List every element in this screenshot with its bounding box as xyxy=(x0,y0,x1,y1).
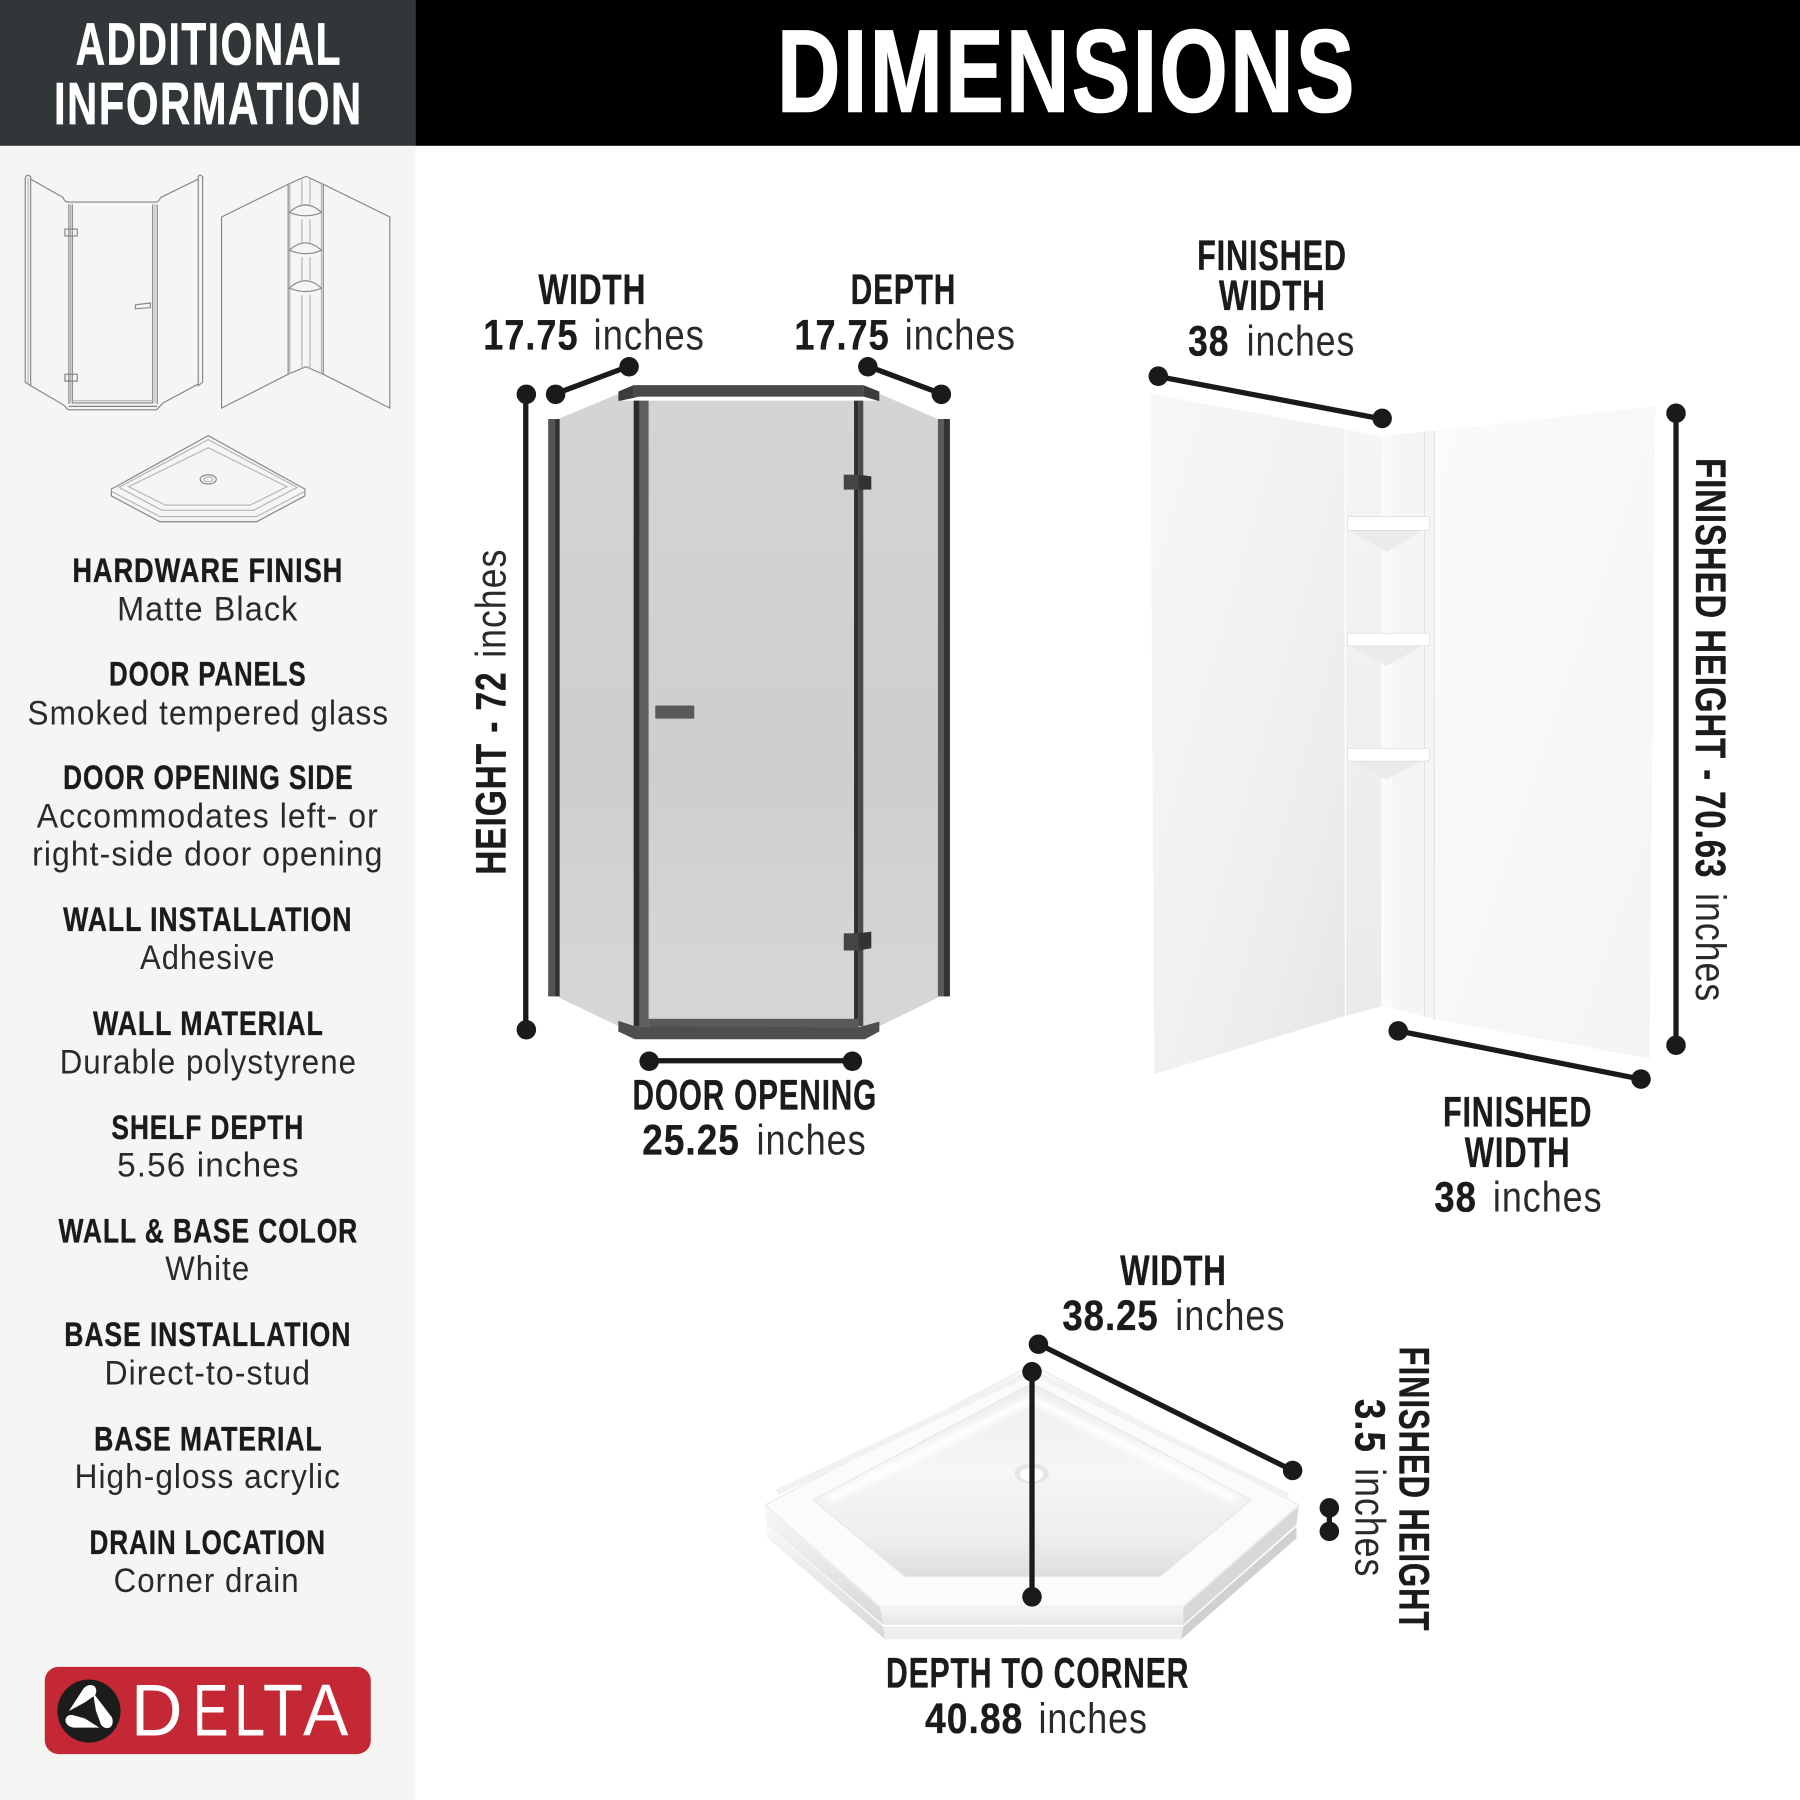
spec: wall installation: Adhesive xyxy=(140,939,276,977)
logo: delta: E xyxy=(193,1669,228,1752)
sidebar background xyxy=(0,146,416,1800)
header rail xyxy=(634,385,864,397)
spec: wall installation: WALL INSTALLATION xyxy=(63,901,352,939)
spec: wall material xyxy=(60,1005,357,1081)
dimension: door width xyxy=(483,266,705,404)
dimension: finished width bottom: WIDTH xyxy=(1465,1129,1570,1176)
icon: shower base line drawing xyxy=(111,436,305,522)
lower hinge xyxy=(844,932,871,951)
logo: delta xyxy=(45,1667,371,1754)
spec: shelf depth: 5.56 inches xyxy=(117,1147,300,1185)
recess ridge highlight xyxy=(829,1399,1235,1499)
logo: delta: A xyxy=(303,1669,348,1752)
spec: base installation: BASE INSTALLATION xyxy=(64,1316,351,1354)
upper skirt faces xyxy=(765,1505,883,1625)
dimension: door opening: 25.25 xyxy=(642,1116,740,1163)
spec: wall installation xyxy=(63,901,352,977)
dimension: finished width top: inches xyxy=(1247,317,1355,364)
spec: base material: High-gloss acrylic xyxy=(75,1458,341,1496)
dimension: base width: inches xyxy=(1175,1292,1285,1339)
spec: door panels: Smoked tempered glass xyxy=(28,694,389,732)
dimension: finished width top xyxy=(1149,232,1392,428)
spec: shelf depth: SHELF DEPTH xyxy=(111,1109,304,1147)
dimension: door depth: inches xyxy=(905,312,1016,359)
dimension: door opening: DOOR OPENING xyxy=(633,1072,877,1119)
lower skirt faces xyxy=(767,1526,885,1639)
spec: base material xyxy=(75,1420,341,1496)
glass panels xyxy=(558,394,938,1026)
spec: hardware finish xyxy=(72,552,343,628)
spec: wall and base color: White xyxy=(165,1250,250,1288)
logo: delta: D xyxy=(131,1669,183,1752)
dimension: door width: 17.75 xyxy=(483,312,579,359)
dimension: depth to corner: inches xyxy=(1038,1695,1148,1742)
spec: drain location: DRAIN LOCATION xyxy=(90,1524,326,1562)
hinges xyxy=(844,475,871,490)
dimension: finished width top: FINISHED xyxy=(1197,232,1347,279)
logo: delta: L xyxy=(234,1669,265,1752)
logo: delta: T xyxy=(263,1669,303,1752)
dimension: depth to corner: 40.88 xyxy=(925,1695,1023,1742)
dimension: door opening: inches xyxy=(757,1116,867,1163)
dimension: finished width bottom xyxy=(1388,1021,1651,1220)
dimension: finished base height: inches xyxy=(1346,1468,1393,1577)
sidebar heading: additional information: INFORMATION xyxy=(54,70,363,137)
spec: wall material: WALL MATERIAL xyxy=(93,1005,324,1043)
shelf 2 xyxy=(1347,633,1430,666)
spec: drain location xyxy=(90,1524,326,1600)
shower door illustration xyxy=(548,385,950,1039)
icon: wall panels line drawing xyxy=(222,176,390,408)
sidebar heading: additional information: ADDITIONAL xyxy=(76,10,342,77)
dimension: finished width bottom: FINISHED xyxy=(1443,1089,1592,1136)
corner column xyxy=(1345,429,1382,1016)
dimension: depth to corner xyxy=(886,1362,1189,1742)
recess floor xyxy=(813,1383,1251,1577)
right panel xyxy=(1434,406,1655,1058)
door frame xyxy=(634,401,639,1026)
spec: base material: BASE MATERIAL xyxy=(94,1420,323,1458)
dimension: finished base height xyxy=(1320,1347,1437,1631)
dimension: door width: inches xyxy=(593,312,705,359)
drain xyxy=(1014,1463,1049,1484)
dimension: finished height: inches xyxy=(1687,893,1734,1002)
rim chamfer xyxy=(777,1372,1288,1496)
icon: shower door line drawing xyxy=(25,175,203,410)
dimension: finished height: FINISHED HEIGHT - 70.63 xyxy=(1687,458,1734,878)
dimension: door depth xyxy=(794,266,1016,404)
shelf 1 xyxy=(1347,517,1430,552)
dimension: finished width bottom: inches xyxy=(1493,1173,1603,1220)
spec: door opening side: Accommodates left- or xyxy=(37,798,379,836)
spec: door opening side: right-side door opening xyxy=(32,836,383,874)
dimension: base width: 38.25 xyxy=(1062,1292,1159,1339)
spec: shelf depth xyxy=(111,1109,304,1185)
dimension: door height xyxy=(468,385,536,1039)
spec: hardware finish: HARDWARE FINISH xyxy=(72,552,343,590)
spec: door opening side xyxy=(32,759,383,874)
dimension: door height: HEIGHT - 72 xyxy=(468,672,515,875)
spec: wall material: Durable polystyrene xyxy=(60,1043,357,1081)
spec: door panels: DOOR PANELS xyxy=(109,655,307,693)
dimension: door depth: DEPTH xyxy=(851,266,956,313)
spec: door opening side: DOOR OPENING SIDE xyxy=(63,759,354,797)
dimension: depth to corner: DEPTH TO CORNER xyxy=(886,1650,1189,1697)
left panel xyxy=(1150,394,1345,1074)
dimension: finished base height: 3.5 xyxy=(1346,1399,1393,1453)
title: dimensions: DIMENSIONS xyxy=(777,5,1357,136)
spec: wall and base color: WALL & BASE COLOR xyxy=(59,1213,358,1251)
wall panels illustration xyxy=(1150,394,1655,1074)
side posts xyxy=(548,419,555,996)
spec: drain location: Corner drain xyxy=(114,1562,300,1600)
shelf 3 xyxy=(1347,748,1430,779)
dimension: door height: inches xyxy=(468,549,515,658)
spec: base installation xyxy=(64,1316,351,1392)
dimension: door opening xyxy=(633,1052,877,1163)
dimension: door depth: 17.75 xyxy=(794,312,890,359)
dimension: door width: WIDTH xyxy=(538,266,646,313)
spec: wall and base color xyxy=(59,1213,358,1288)
handle xyxy=(655,706,694,719)
spec: door panels xyxy=(28,655,389,732)
spec: hardware finish: Matte Black xyxy=(117,590,298,628)
dimension: finished width bottom: 38 xyxy=(1434,1173,1477,1220)
dimension: finished base height: FINISHED HEIGHT xyxy=(1390,1347,1437,1631)
sill xyxy=(618,1021,879,1039)
dimension: finished width top: 38 xyxy=(1188,317,1229,364)
title: dimensions xyxy=(416,0,1800,146)
shower base illustration xyxy=(765,1365,1299,1639)
sidebar heading: additional information xyxy=(0,0,416,146)
spec: base installation: Direct-to-stud xyxy=(104,1354,311,1392)
dimension: base width xyxy=(1029,1247,1302,1480)
dimension: finished height xyxy=(1666,404,1734,1055)
dimension: finished width top: WIDTH xyxy=(1219,272,1326,319)
dimension: base width: WIDTH xyxy=(1120,1247,1227,1294)
rim xyxy=(765,1365,1299,1607)
